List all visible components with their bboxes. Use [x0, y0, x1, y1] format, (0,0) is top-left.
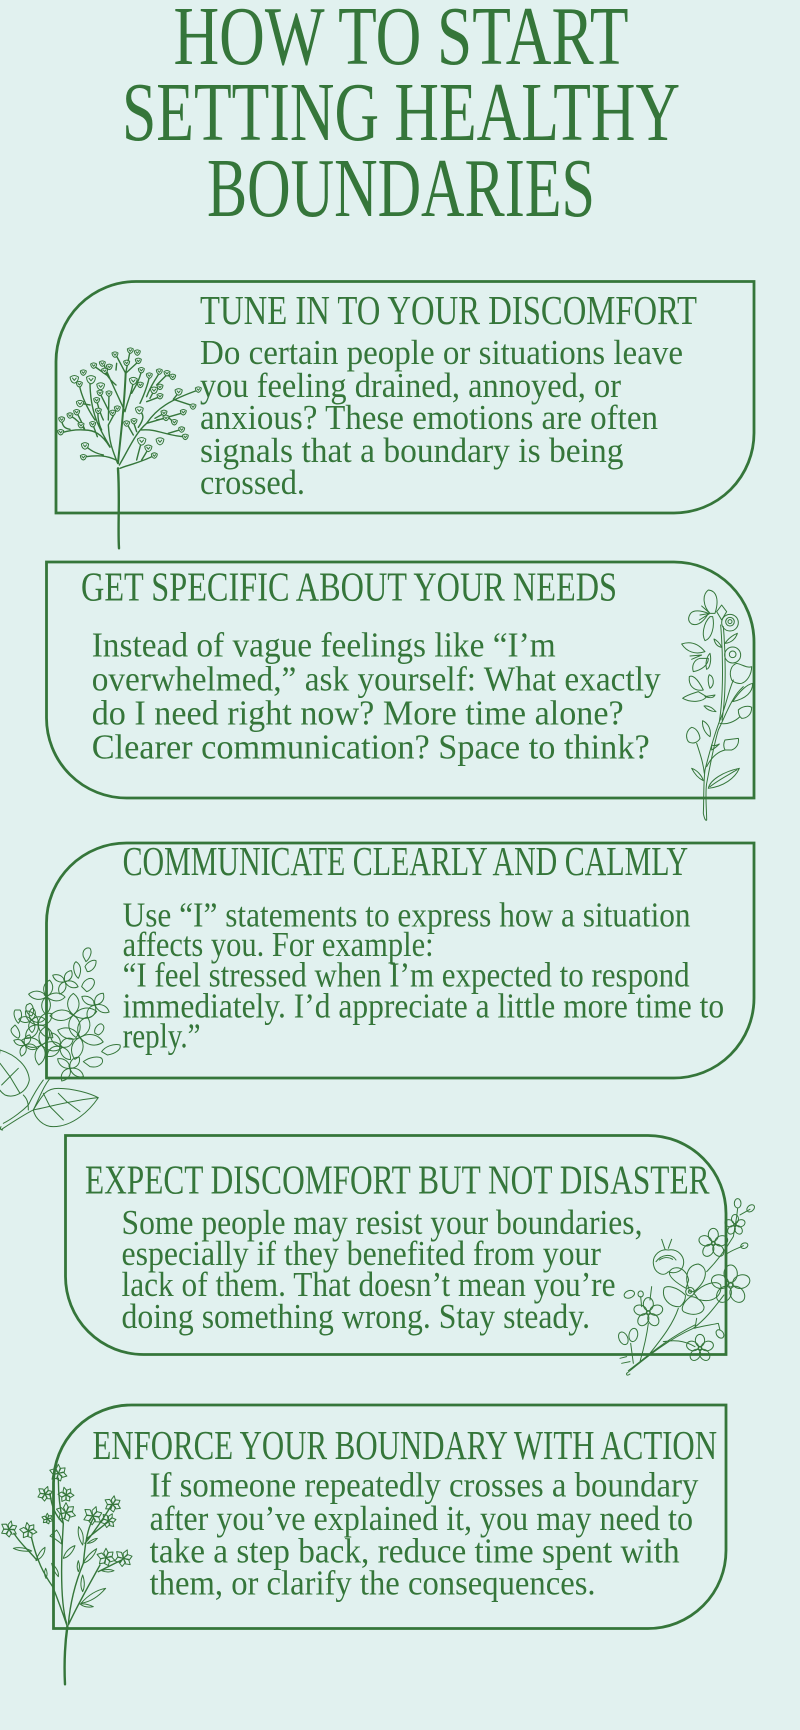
panel outline 1 — [56, 282, 754, 513]
body text 3: reply.” — [123, 1017, 201, 1055]
body text 1: Do certain people or situations leave — [200, 334, 683, 372]
body text 3 — [123, 897, 724, 1055]
icon: wildflower stems — [0, 1464, 135, 1684]
body text 2: do I need right now? More time alone? — [92, 695, 624, 733]
body text 4 — [122, 1204, 642, 1336]
body text 5: If someone repeatedly crosses a boundary — [150, 1467, 699, 1505]
panel: enforce your boundary with action — [54, 1405, 726, 1628]
panel: expect discomfort but not disaster — [66, 1136, 726, 1354]
icon: lilac branch — [0, 948, 120, 1130]
icon: blossom sprig — [682, 590, 753, 820]
panel: communicate clearly and calmly — [46, 838, 754, 1078]
body text 3: immediately. I’d appreciate a little more time to — [123, 988, 724, 1026]
body text 5: take a step back, reduce time spent with — [150, 1532, 680, 1570]
title: BOUNDARIES — [207, 142, 595, 235]
body text 4: especially if they benefited from your — [122, 1235, 601, 1273]
body text 1: you feeling drained, annoyed, or — [200, 367, 621, 405]
body text 2: Clearer communication? Space to think? — [92, 729, 650, 767]
panel outline 3 — [46, 843, 754, 1078]
title — [122, 0, 680, 235]
body text 5: them, or clarify the consequences. — [150, 1564, 596, 1602]
panel: get specific about your needs — [46, 562, 754, 798]
body text 4: Some people may resist your boundaries, — [122, 1204, 642, 1242]
icon: cherry blossom branch — [617, 1199, 756, 1375]
body text 3: affects you. For example: — [123, 926, 434, 964]
body text 4: lack of them. That doesn’t mean you’re — [122, 1266, 616, 1304]
heading 2: GET SPECIFIC ABOUT YOUR NEEDS — [81, 564, 617, 610]
icon: baby's breath tree — [58, 348, 201, 548]
body text 4: doing something wrong. Stay steady. — [122, 1298, 590, 1336]
body text 3: “I feel stressed when I’m expected to respond — [123, 957, 690, 995]
panel outline 2 — [46, 562, 754, 798]
body text 1: signals that a boundary is being — [200, 432, 624, 470]
body text 2: Instead of vague feelings like “I’m — [92, 627, 556, 665]
body text 1 — [200, 334, 683, 502]
panel outline 5 — [54, 1405, 726, 1628]
body text 5: after you’ve explained it, you may need to — [150, 1500, 693, 1538]
body text 2 — [92, 627, 661, 767]
body text 2: overwhelmed,” ask yourself: What exactly — [92, 661, 661, 699]
body text 1: anxious? These emotions are often — [200, 399, 658, 437]
body text 5 — [150, 1467, 699, 1602]
panel outline 4 — [66, 1136, 726, 1354]
panel: tune in to your discomfort — [56, 282, 754, 513]
body text 1: crossed. — [200, 464, 305, 502]
body text 3: Use “I” statements to express how a situation — [123, 897, 691, 935]
